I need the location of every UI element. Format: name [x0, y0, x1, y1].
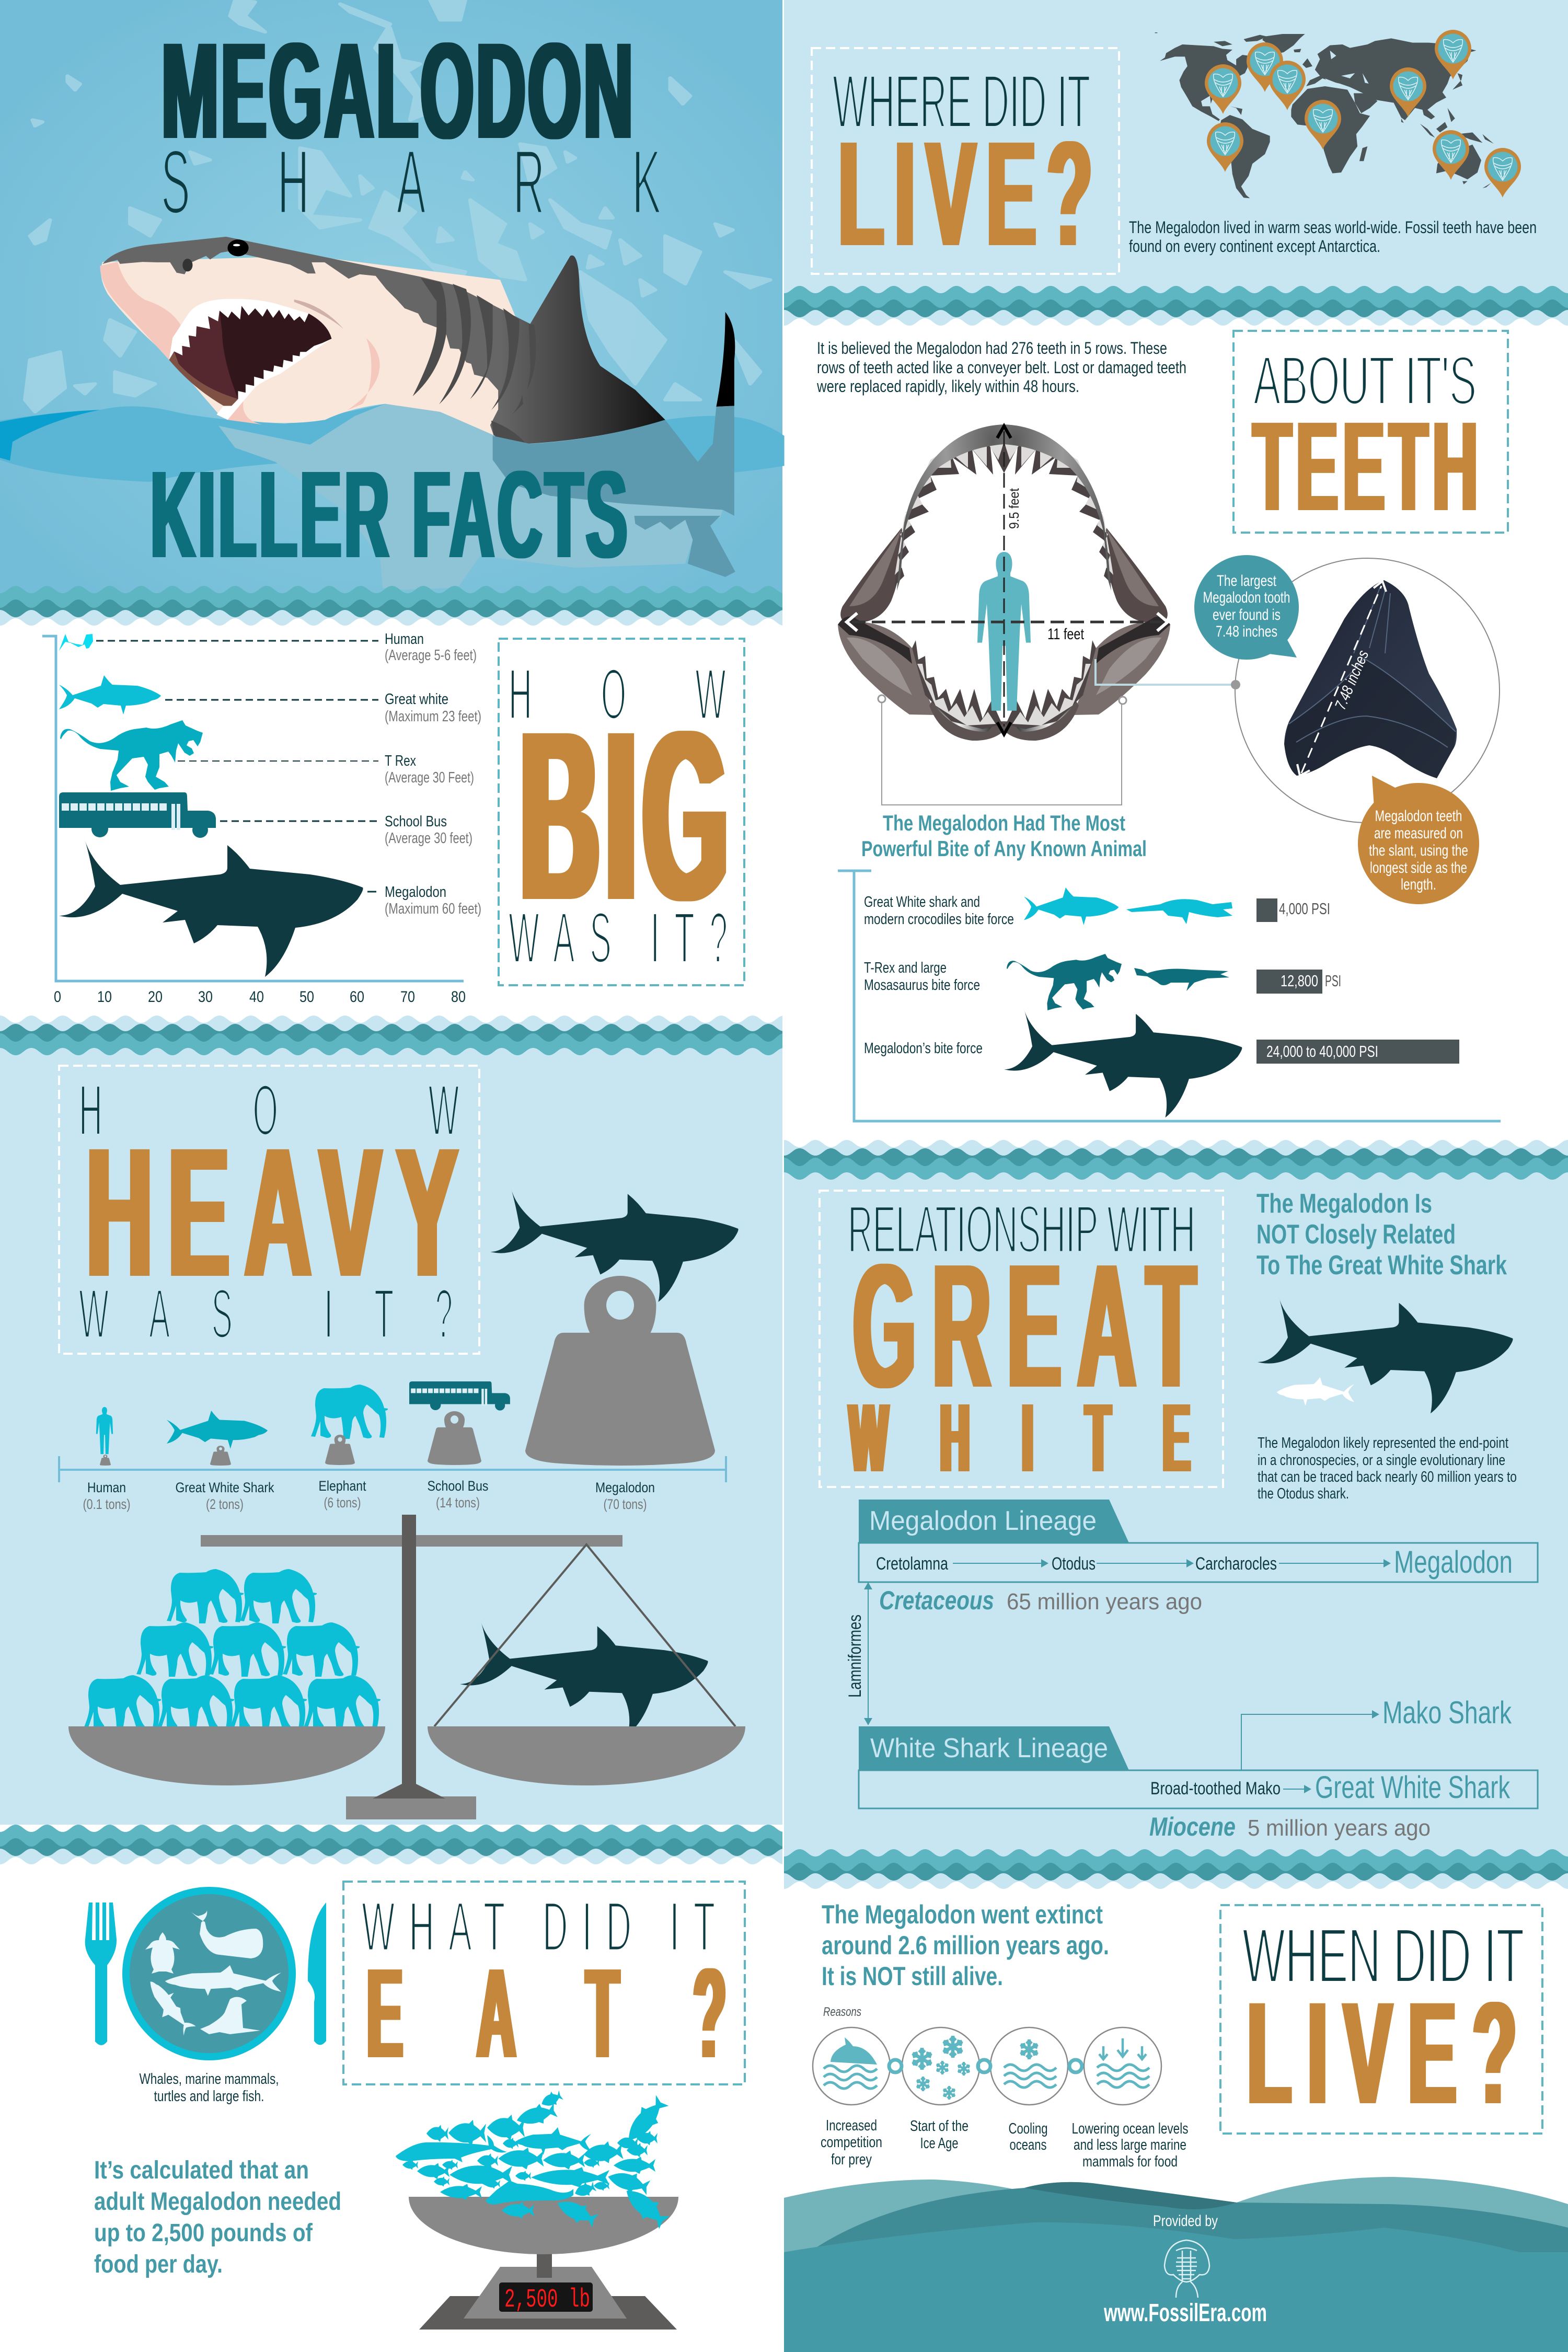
reason labels: Increased	[826, 2117, 877, 2134]
illustration: balance scale	[68, 1515, 745, 1819]
labels: School Bus	[385, 813, 447, 830]
subheading: not closely related: The Megalodon Is	[1256, 1189, 1432, 1219]
labels: (0.1 tons)	[83, 1496, 131, 1512]
diagram: white shark lineage: White Shark Lineage	[870, 1733, 1108, 1763]
axis numbers: 80	[451, 988, 466, 1006]
chart: size comparison	[42, 631, 481, 1006]
illustration: megalodon tooth: 7.48 inches	[1332, 648, 1372, 712]
heading box: about its teeth: TEETH	[1253, 395, 1478, 537]
heading: most powerful bite: The Megalodon Had The Most	[883, 811, 1125, 835]
labels: (Average 5-6 feet)	[385, 647, 477, 664]
row: megalodon: Megalodon’s bite force	[864, 1040, 983, 1057]
reason labels: Cooling	[1009, 2120, 1047, 2137]
heading box: how heavy was it: HEAVY	[86, 1109, 458, 1315]
heading box: how heavy was it: WAS IT?	[79, 1275, 453, 1353]
callout: largest tooth: 7.48 inches	[1216, 623, 1277, 640]
axis numbers: 70	[400, 988, 415, 1006]
axis numbers: 20	[148, 988, 163, 1006]
callout: measuring teeth: the slant, using the	[1369, 842, 1468, 859]
wave divider	[0, 1016, 782, 1055]
icon: school bus	[59, 792, 216, 838]
heading box: when did it live: LIVE?	[1247, 1971, 1517, 2134]
heading box: how big was it: HOW	[509, 653, 726, 734]
axis numbers: 10	[97, 988, 112, 1006]
reason labels: mammals for food	[1082, 2153, 1178, 2170]
large tooth detail circle	[1096, 558, 1500, 823]
reason labels: for prey	[831, 2151, 872, 2168]
text: chronospecies: the Otodus shark.	[1258, 1485, 1349, 1502]
leader lines	[96, 641, 378, 892]
heading box: where did it live: WHERE DID IT	[833, 60, 1090, 143]
icon: bus on weight	[409, 1381, 510, 1465]
icon: great white	[59, 675, 161, 714]
reason labels: oceans	[1010, 2137, 1046, 2153]
wave divider	[0, 586, 782, 626]
scale display	[499, 2282, 593, 2315]
text: extinction: around 2.6 million years ago.	[822, 1931, 1109, 1960]
subheading: not closely related: NOT Closely Related	[1256, 1219, 1456, 1250]
diagram: white shark lineage: Broad-toothed Mako	[1150, 1779, 1281, 1798]
wave divider	[784, 1140, 1568, 1180]
text: teeth intro: were replaced rapidly, likely within 48 hours.	[816, 377, 1079, 396]
panel: relationship with great white	[784, 1140, 1568, 1889]
row: t-rex and mosasaurus: Mosasaurus bite force	[864, 977, 980, 994]
heading box: what did it eat: EAT?	[367, 1942, 726, 2084]
scale display: 2,500 lb	[504, 2285, 590, 2315]
row: great white and crocodile	[864, 887, 1330, 928]
axis numbers	[54, 988, 466, 1006]
heading box: relationship with great white: GREAT	[853, 1228, 1196, 1424]
arrow: lamniformes: Lamniformes	[845, 1615, 865, 1698]
reason labels: Lowering ocean levels	[1071, 2120, 1189, 2137]
reason labels	[821, 2117, 1189, 2170]
text: diet caption: Whales, marine mammals,	[139, 2071, 279, 2088]
panel: how big was it	[42, 631, 744, 1006]
heading box: relationship with great white: WHITE	[849, 1384, 1190, 1492]
text: chronospecies	[1258, 1435, 1517, 1502]
title: Megalodon: MEGALODON	[162, 14, 633, 167]
icon: megalodon	[59, 837, 363, 977]
labels: Great White Shark	[176, 1480, 274, 1495]
icon: fossil pins	[1205, 30, 1521, 198]
axis numbers: 50	[299, 988, 314, 1006]
text: diet caption	[139, 2071, 279, 2105]
text: miocene era: Miocene	[1149, 1812, 1236, 1841]
labels: (Average 30 Feet)	[385, 769, 474, 786]
height measure: 9.5 feet	[1006, 488, 1022, 529]
text: extinction: It is NOT still alive.	[822, 1962, 1003, 1991]
text: chronospecies: in a chronospecies, or a single evolutionary line	[1258, 1452, 1505, 1469]
illustration: shark jaw with human for scale	[838, 424, 1170, 741]
icon: human silhouette	[977, 552, 1031, 711]
diagram: extinction reasons	[813, 2027, 1189, 2170]
heading box: what did it eat: WHAT DID IT	[362, 1888, 715, 1966]
diagram: megalodon lineage: Megalodon Lineage	[869, 1506, 1097, 1536]
icon: elephant on weight	[311, 1385, 388, 1465]
title: Killer Facts: KILLER FACTS	[151, 445, 627, 584]
text: cretaceous era: 65 million years ago	[1007, 1589, 1202, 1615]
footer	[784, 2177, 1568, 2352]
axis numbers: 40	[249, 988, 264, 1006]
diagram: white shark lineage: Mako Shark	[1382, 1695, 1512, 1730]
callout: measuring teeth: are measured on	[1374, 825, 1463, 842]
panel: when did it live	[813, 1900, 1542, 2170]
heading box: how big was it	[499, 639, 744, 985]
axis numbers: 60	[350, 988, 364, 1006]
text: teeth intro	[816, 339, 1186, 396]
height measure	[997, 426, 1022, 734]
labels: School Bus	[428, 1478, 488, 1494]
text: extinction	[822, 1900, 1109, 1991]
labels: Megalodon	[595, 1480, 655, 1495]
wave divider	[0, 1825, 782, 1864]
row: t-rex and mosasaurus	[864, 954, 1341, 1010]
footer hills	[784, 2177, 1568, 2352]
heading box: how heavy was it: HOW	[79, 1069, 459, 1150]
callout: measuring teeth	[1358, 776, 1479, 904]
diagram: megalodon lineage: Cretolamna	[876, 1554, 948, 1574]
text: teeth intro: It is believed the Megalodon had 276 teeth in 5 rows. These	[817, 339, 1167, 358]
row: t-rex and mosasaurus: T-Rex and large	[864, 960, 947, 976]
labels	[83, 1478, 655, 1512]
text: food per day: adult Megalodon needed	[94, 2188, 341, 2216]
panel: how heavy was it	[0, 1016, 782, 1864]
reason labels: Start of the	[910, 2118, 969, 2135]
text: food per day: up to 2,500 pounds of	[94, 2219, 313, 2247]
icon: trilobite logo	[1165, 2240, 1209, 2298]
text: provided by: Provided by	[1153, 2212, 1218, 2230]
diagram: megalodon lineage: Megalodon	[1394, 1544, 1513, 1579]
heading: most powerful bite: Powerful Bite of Any Known Animal	[861, 836, 1147, 861]
text: website: www.FossilEra.com	[1103, 2299, 1267, 2327]
text: cretaceous era	[879, 1586, 1202, 1615]
diagram: white shark lineage	[859, 1695, 1538, 1808]
heading box: how big was it: BIG	[521, 681, 728, 950]
callout: measuring teeth: longest side as the	[1370, 859, 1467, 877]
labels: T Rex	[385, 753, 416, 769]
icon: prey silhouettes	[141, 1910, 281, 2039]
text: where it lived	[1129, 218, 1537, 256]
subheading: not closely related	[1256, 1189, 1507, 1281]
illustration: shark in the water	[0, 0, 785, 590]
row: great white and crocodile: modern crocodiles bite force	[864, 911, 1014, 928]
labels: (Average 30 feet)	[385, 830, 472, 847]
row: megalodon: 24,000 to 40,000 PSI	[1266, 1042, 1378, 1060]
labels: Elephant	[319, 1478, 366, 1494]
text: extinction: The Megalodon went extinct	[822, 1900, 1103, 1929]
labels: Megalodon	[385, 884, 446, 901]
icon: fork	[85, 1903, 117, 2045]
illustration: food scale	[396, 2089, 678, 2330]
wave divider	[784, 1849, 1568, 1889]
icon: cooling ocean	[1004, 2039, 1056, 2088]
heading box: relationship with great white	[820, 1191, 1223, 1492]
width measure	[847, 613, 1168, 643]
panel: what did it eat	[85, 1882, 745, 2330]
text: food per day	[94, 2157, 341, 2278]
row: great white and crocodile: Great White shark and	[864, 894, 980, 910]
text: diet caption: turtles and large fish.	[154, 2088, 264, 2105]
text: reasons label: Reasons	[823, 2005, 861, 2019]
labels: (6 tons)	[324, 1495, 361, 1511]
row: t-rex and mosasaurus: 12,800	[1281, 972, 1318, 990]
row: t-rex and mosasaurus: PSI	[1325, 972, 1341, 990]
bracket under jaw	[878, 695, 1126, 805]
text: miocene era	[1149, 1812, 1431, 1841]
title: Shark: SHARK	[161, 131, 661, 233]
reason labels: and less large marine	[1074, 2137, 1186, 2153]
icon: diver	[59, 634, 93, 651]
axis numbers: 0	[54, 988, 61, 1006]
callout: largest tooth	[1194, 555, 1299, 660]
diagram: megalodon lineage	[859, 1500, 1538, 1582]
heading box: relationship with great white: RELATIONSHIP WITH	[848, 1192, 1195, 1267]
heading box: how heavy was it	[59, 1066, 479, 1354]
callout: largest tooth: The largest	[1217, 572, 1277, 590]
text: miocene era: 5 million years ago	[1248, 1815, 1431, 1841]
heading: most powerful bite	[861, 811, 1147, 861]
illustration: megalodon tooth	[1284, 580, 1457, 778]
text: where it lived: found on every continent except Antarctica.	[1129, 237, 1380, 256]
world map with fossil pins	[1155, 30, 1521, 198]
icon: orca in water	[824, 2037, 877, 2089]
heading box: about its teeth	[1233, 331, 1508, 537]
icon: lowering ocean	[1097, 2038, 1149, 2088]
callout: measuring teeth: length.	[1401, 876, 1436, 893]
icon: shark on weight	[167, 1411, 268, 1466]
icon: t-rex	[60, 720, 203, 791]
icon: plate with cutlery	[85, 1887, 326, 2060]
panel: about its teeth	[816, 331, 1508, 1121]
text: teeth intro: rows of teeth acted like a conveyer belt. Lost or damaged teeth	[817, 358, 1186, 377]
diagram: white shark lineage: Great White Shark	[1315, 1770, 1511, 1805]
diagram: megalodon lineage: Carcharocles	[1195, 1554, 1277, 1574]
heading box: when did it live	[1220, 1905, 1542, 2134]
labels: Great white	[385, 691, 448, 708]
heading box: where did it live: LIVE?	[838, 110, 1092, 277]
labels: (Maximum 60 feet)	[385, 901, 481, 917]
icon: knife	[308, 1903, 326, 2045]
text: food per day: food per day.	[94, 2251, 223, 2278]
reason labels: competition	[821, 2134, 882, 2151]
arrow: lamniformes	[845, 1582, 872, 1725]
icon: megalodon on weight	[490, 1187, 739, 1466]
labels: (Maximum 23 feet)	[385, 708, 481, 725]
callout: largest tooth: Megalodon tooth	[1203, 589, 1290, 606]
reason labels: Ice Age	[920, 2135, 959, 2152]
labels: (70 tons)	[603, 1496, 647, 1512]
heading box: what did it eat	[343, 1882, 745, 2084]
heading box: where did it live	[812, 48, 1119, 277]
row: great white and crocodile: 4,000 PSI	[1279, 900, 1330, 918]
icon: megalodon vs great white	[1258, 1296, 1513, 1413]
labels: Human	[385, 631, 424, 648]
labels: (14 tons)	[436, 1495, 480, 1511]
icon: human on weight	[96, 1407, 113, 1466]
text: food per day: It’s calculated that an	[94, 2157, 309, 2184]
chart: weight comparison	[59, 1187, 739, 1512]
fish pile	[396, 2089, 672, 2231]
chart: bite force comparison	[838, 871, 1501, 1121]
labels	[385, 631, 481, 917]
icon: snowflakes	[913, 2036, 970, 2100]
wave divider	[784, 286, 1568, 326]
elephants on the left pan	[84, 1569, 381, 1730]
text: cretaceous era: Cretaceous	[879, 1586, 994, 1615]
callout: measuring teeth: Megalodon teeth	[1375, 808, 1462, 825]
labels: (2 tons)	[206, 1496, 244, 1512]
megalodon on the right pan	[460, 1620, 708, 1734]
panel: where did it live	[784, 0, 1568, 326]
width measure: 11 feet	[1047, 626, 1085, 643]
panel: hero	[0, 0, 785, 626]
row: megalodon	[864, 1008, 1459, 1117]
callout: largest tooth: ever found is	[1213, 606, 1281, 624]
heading box: how big was it: WAS IT?	[509, 897, 728, 978]
icon: plate	[122, 1887, 296, 2060]
labels: Human	[87, 1480, 126, 1495]
axis numbers: 30	[198, 988, 213, 1006]
diagram: megalodon lineage: Otodus	[1052, 1554, 1096, 1574]
